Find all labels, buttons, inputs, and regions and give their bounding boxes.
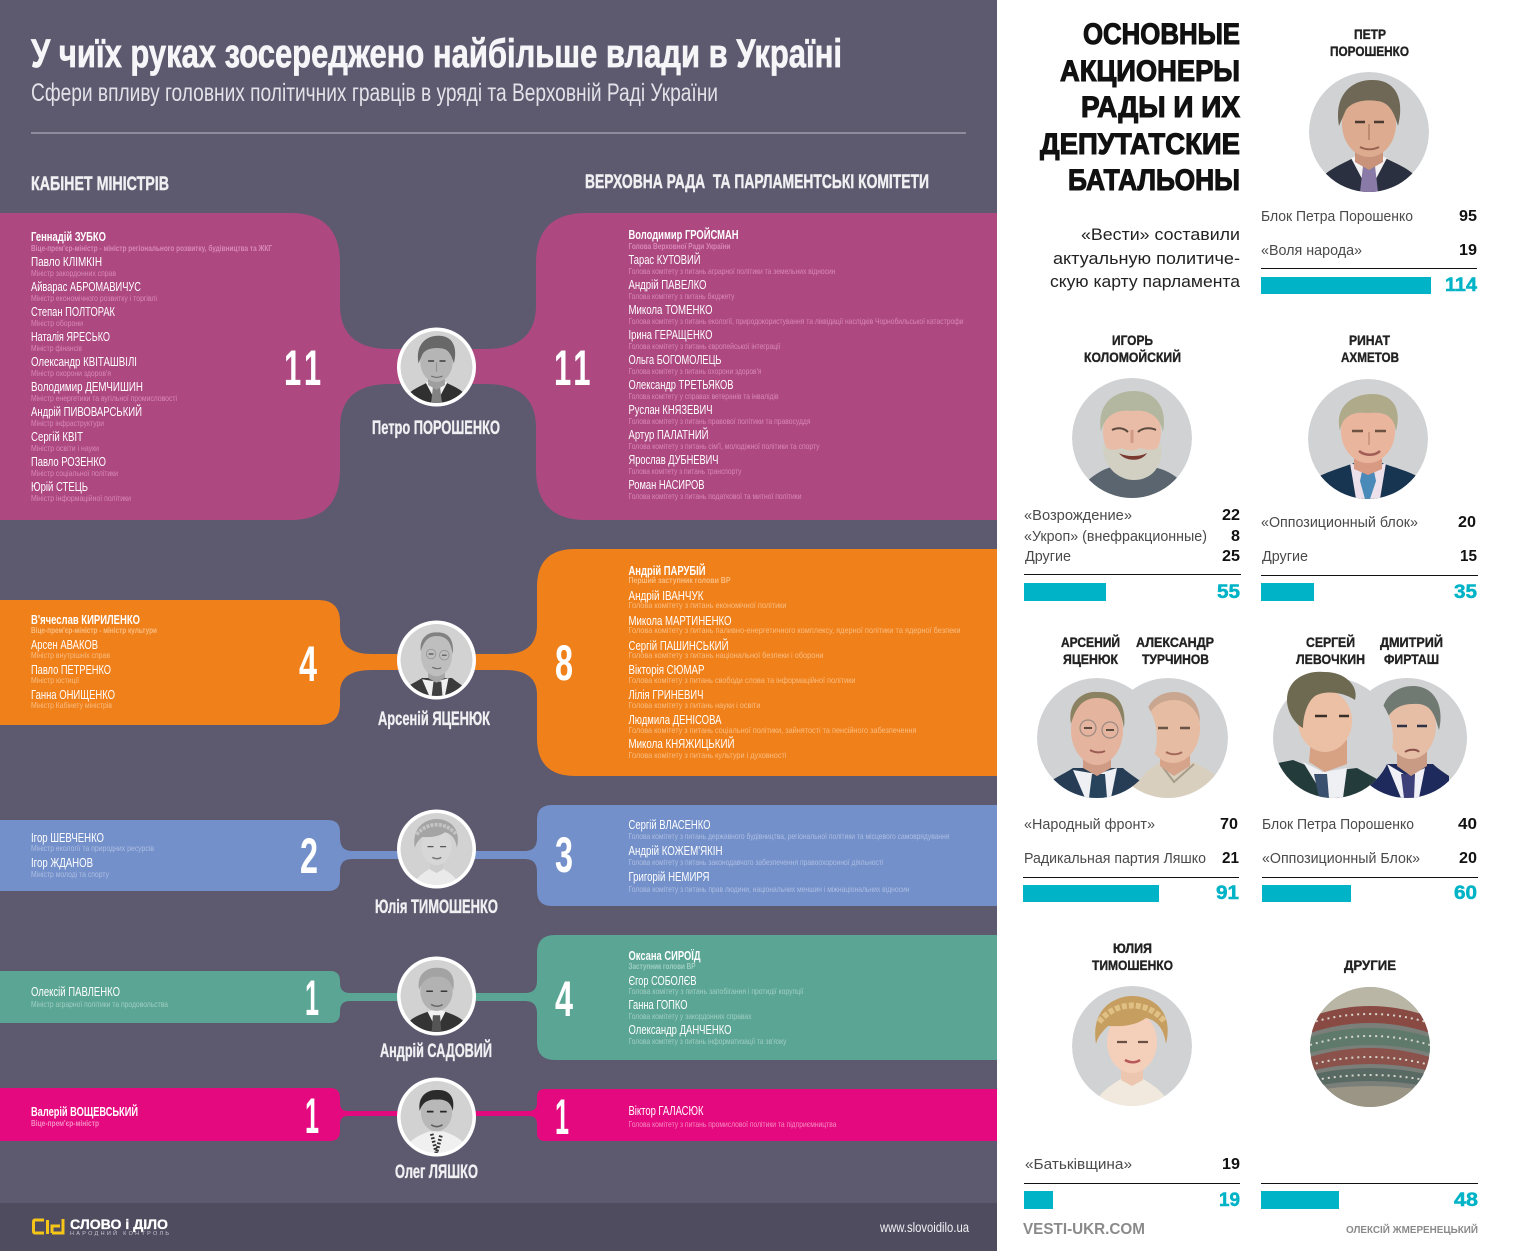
portrait: Sadovyi small [397,956,476,1036]
list: Poroshenko parliament: Голова комітету з питань сім'ї, молодіжної політики та спорту [628,441,820,451]
list: Poroshenko parliament: Голова комітету з питань транспорту [628,466,742,476]
list: Tymoshenko ministers: Ігор ЖДАНОВ [31,855,93,870]
name: Arsenii Yatseniuk: Арсеній ЯЦЕНЮК [378,709,490,730]
count: ministers 2: 2 [300,828,318,884]
card: Yatseniuk and Turchynov: «Народный фронт» [1024,816,1155,833]
list: Poroshenko ministers: Віце-прем'єр-міністр - міністр регіонального розвитку, будівництва та ЖКГ [31,243,272,253]
list: Poroshenko ministers: Міністр соціальної політики [31,468,118,478]
list: Sadovyi parliament: Оксана СИРОЇД [628,948,701,963]
source credit: VESTI-UKR.COM [1023,1221,1145,1238]
list: Sadovyi parliament: Голова комітету у закордонних справах [628,1011,752,1021]
card: Akhmetov: АХМЕТОВ [1341,350,1399,365]
website url: www.slovoidilo.ua [879,1219,969,1235]
card: Kolomoisky [1024,333,1241,603]
card: Yatseniuk and Turchynov [1023,635,1239,904]
list: Yatseniuk parliament: Голова комітету з питань паливно-енергетичного комплексу, ядерної політики та ядерної безпеки [628,625,961,635]
list: Lyashko minister [31,1104,138,1128]
count: committees 4: 4 [555,971,573,1027]
card: others: ДРУГИЕ [1344,958,1396,973]
card: Levochkin and Firtash: ЛЕВОЧКИН [1296,652,1365,667]
list: Yatseniuk parliament: Андрій ІВАНЧУК [628,588,704,603]
card: Levochkin and Firtash: 40 [1458,816,1477,833]
column heading: parliament: ВЕРХОВНА РАДА ТА ПАРЛАМЕНТСЬКІ КОМІТЕТИ [585,172,929,193]
list: Yatseniuk parliament: Голова комітету з питань національної безпеки і оборони [628,650,824,660]
card: Poroshenko: Блок Петра Порошенко [1261,208,1413,225]
list: Poroshenko parliament: Голова комітету з питань охорони здоров'я [628,366,762,376]
lead text [1050,225,1241,291]
card: Akhmetov: 15 [1460,548,1477,565]
list: Yatseniuk parliament: Голова комітету з питань науки і освіти [628,700,761,710]
list: Yatseniuk parliament: Лілія ГРИНЕВИЧ [628,687,704,702]
card: Poroshenko: 114 [1445,275,1477,296]
list: Yatseniuk ministers: Віце-прем'єр-міністр - міністр культури [31,625,157,635]
lead text: актуальную политиче- [1053,249,1240,268]
list: Poroshenko ministers: Сергій КВІТ [31,429,83,444]
list: Lyashko parliament: Голова комітету з питань промислової політики та підприємництва [628,1119,837,1129]
list: Tymoshenko parliament: Григорій НЕМИРЯ [628,869,710,884]
list: Sadovyi parliament: Голова комітету з питань інформатизації та зв'язку [628,1036,787,1046]
list: Lyashko minister: Валерій ВОЩЕВСЬКИЙ [31,1104,138,1119]
list: Tymoshenko ministers: Міністр молоді та спорту [31,869,110,879]
list: Poroshenko parliament: Ярослав ДУБНЕВИЧ [628,452,718,467]
main title: У чиїх руках зосереджено найбільше влади в Україні [31,32,842,76]
list: Yatseniuk parliament: Микола КНЯЖИЦЬКИЙ [628,736,734,751]
card: others [1261,958,1478,1211]
list: Poroshenko parliament: Голова комітету з питань податкової та митної політики [628,491,802,501]
list: Poroshenko parliament: Ірина ГЕРАЩЕНКО [628,327,712,342]
portrait: Poroshenko small [397,328,476,406]
logo: Slovo i Dilo: СЛОВО і ДІЛО [70,1217,168,1232]
card: Levochkin and Firtash: ДМИТРИЙ [1380,635,1443,650]
list: Poroshenko parliament: Артур ПАЛАТНИЙ [628,427,708,442]
right heading: БАТАЛЬОНЫ [1068,164,1240,197]
list: Yatseniuk parliament: Сергій ПАШИНСЬКИЙ [628,638,728,653]
card: Tymoshenko: 19 [1219,1190,1240,1211]
list: Sadovyi ministers: Олексій ПАВЛЕНКО [31,984,120,999]
card: Akhmetov: Другие [1262,548,1308,565]
author credit: ОЛЕКСІЙ ЖМЕРЕНЕЦЬКИЙ [1346,1223,1478,1236]
list: Poroshenko ministers [31,229,272,503]
list: Poroshenko ministers: Павло РОЗЕНКО [31,454,106,469]
right heading: ОСНОВНЫЕ [1083,18,1240,51]
list: Poroshenko ministers: Олександр КВІТАШВІЛІ [31,354,137,369]
list: Tymoshenko parliament: Сергій ВЛАСЕНКО [628,817,710,832]
list: Poroshenko parliament: Голова комітету у справах ветеранів та інвалідів [628,391,779,401]
card: Levochkin and Firtash: «Оппозиционный Блок» [1262,850,1420,867]
right heading [1040,18,1240,197]
card: Yatseniuk and Turchynov: 21 [1222,850,1239,867]
list: Poroshenko ministers: Міністр енергетики та вугільної промисловості [31,393,177,403]
list: Tymoshenko ministers [31,830,154,879]
list: Sadovyi parliament: Ганна ГОПКО [628,997,688,1012]
list: Poroshenko parliament: Голова комітету з питань екології, природокористування та ліквідації наслідків Чорнобильської катастрофи [628,316,964,326]
subtitle: Сфери впливу головних політичних гравців в уряді та Верховній Раді України [31,79,718,107]
card: Kolomoisky: ИГОРЬ [1112,333,1153,348]
list: Yatseniuk ministers [31,612,157,710]
list: Tymoshenko parliament: Голова комітету з питань державного будівництва, регіональної політики та місцевого самоврядування [628,831,950,841]
card: others: 48 [1454,1190,1478,1211]
list: Yatseniuk ministers: Міністр юстиції [31,675,80,685]
list: Poroshenko ministers: Павло КЛІМКІН [31,254,102,269]
list: Poroshenko ministers: Айварас АБРОМАВИЧУС [31,279,141,294]
lead text: «Вести» составили [1081,225,1240,244]
panel: Poroshenko group [0,213,997,520]
name: Andrii Sadovyi: Андрій САДОВИЙ [380,1040,492,1062]
card: Poroshenko: ПОРОШЕНКО [1330,44,1409,59]
card: Levochkin and Firtash [1262,635,1478,904]
list: Yatseniuk ministers: Арсен АВАКОВ [31,637,98,652]
list: Poroshenko ministers: Наталія ЯРЕСЬКО [31,329,110,344]
list: Tymoshenko ministers: Міністр екології та природних ресурсів [31,843,154,853]
panel: Yatseniuk group [0,549,997,776]
count: committees 3: 3 [555,827,573,883]
list: Poroshenko ministers: Міністр освіти і науки [31,443,99,453]
card: Tymoshenko: «Батьківщина» [1025,1156,1132,1173]
count: ministers 1: 1 [305,970,319,1026]
count: ministers 11: 11 [284,339,321,396]
list: Yatseniuk ministers: Павло ПЕТРЕНКО [31,662,111,677]
name: Petro Poroshenko: Петро ПОРОШЕНКО [372,418,500,439]
list: Poroshenko ministers: Геннадій ЗУБКО [31,229,106,244]
card: Kolomoisky: 55 [1217,582,1240,603]
count: committees 1: 1 [555,1089,569,1145]
right heading: АКЦИОНЕРЫ [1060,55,1240,88]
portrait: Tymoshenko small [397,810,476,888]
list: Poroshenko ministers: Юрій СТЕЦЬ [31,479,88,494]
list: Poroshenko ministers: Міністр економічного розвитку і торгівлі [31,293,157,303]
footer band [0,1203,997,1251]
card: Levochkin and Firtash: СЕРГЕЙ [1306,635,1355,650]
card: Yatseniuk and Turchynov: ТУРЧИНОВ [1142,652,1209,667]
list: Poroshenko ministers: Міністр інформаційної політики [31,493,131,503]
card: Poroshenko: 19 [1459,242,1477,259]
column heading: cabinet: КАБІНЕТ МІНІСТРІВ [31,174,169,195]
portrait: Yatseniuk small [397,620,476,700]
card: Kolomoisky: «Возрождение» [1024,507,1132,524]
list: Poroshenko parliament: Голова комітету з питань аграрної політики та земельних відносин [628,266,836,276]
card: Yatseniuk and Turchynov: 70 [1220,816,1238,833]
panel: Tymoshenko group [0,805,997,906]
card: Tymoshenko: 19 [1222,1156,1240,1173]
right heading: РАДЫ И ИХ [1081,91,1240,124]
logo: Slovo i Dilo: НАРОДНИЙ КОНТРОЛЬ [70,1229,169,1237]
list: Poroshenko ministers: Міністр охорони здоров'я [31,368,111,378]
list: Tymoshenko ministers: Ігор ШЕВЧЕНКО [31,830,104,845]
list: Yatseniuk parliament: Голова комітету з питань свободи слова та інформаційної політики [628,675,856,685]
card: Akhmetov: РИНАТ [1349,333,1391,348]
list: Yatseniuk parliament: Перший заступник голови ВР [628,575,731,585]
list: Poroshenko parliament [628,227,964,501]
card: Poroshenko: «Воля народа» [1261,242,1362,259]
card: Kolomoisky: КОЛОМОЙСКИЙ [1084,350,1181,365]
list: Yatseniuk ministers: Міністр Кабінету міністрів [31,700,112,710]
list: Tymoshenko parliament: Андрій КОЖЕМ'ЯКІН [628,843,722,858]
list: Yatseniuk ministers: Ганна ОНИЩЕНКО [31,687,115,702]
list: Poroshenko parliament: Голова комітету з питань правової політики та правосуддя [628,416,811,426]
card: Tymoshenko [1024,941,1240,1211]
list: Sadovyi parliament: Єгор СОБОЛЄВ [628,973,696,988]
list: Sadovyi parliament [628,948,804,1046]
count: ministers 4: 4 [299,636,317,692]
card: Yatseniuk and Turchynov: Радикальная партия Ляшко [1024,850,1206,867]
card: Akhmetov: 20 [1458,514,1476,531]
list: Poroshenko parliament: Голова комітету з питань європейської інтеграції [628,341,781,351]
list: Sadovyi parliament: Заступник голови ВР [628,961,696,971]
card: Akhmetov [1261,333,1478,603]
card: Levochkin and Firtash: ФИРТАШ [1384,652,1439,667]
lead text: скую карту парламента [1050,272,1241,291]
list: Sadovyi ministers: Міністр аграрної політики та продовольства [31,999,168,1009]
list: Poroshenko ministers: Володимир ДЕМЧИШИН [31,379,143,394]
list: Yatseniuk parliament: Голова комітету з питань економічної політики [628,600,787,610]
name: Oleh Lyashko: Олег ЛЯШКО [395,1162,478,1183]
list: Lyashko parliament [628,1103,837,1129]
right heading: ДЕПУТАТСКИЕ [1040,128,1240,161]
card: Kolomoisky: 22 [1222,507,1240,524]
card: Yatseniuk and Turchynov: АРСЕНИЙ [1061,635,1120,650]
list: Poroshenko parliament: Голова комітету з питань бюджету [628,291,735,301]
list: Poroshenko parliament: Олександр ТРЕТЬЯКОВ [628,377,734,392]
panel: Lyashko group [0,1088,997,1145]
card: Akhmetov: «Оппозиционный блок» [1261,514,1418,531]
list: Yatseniuk parliament: Андрій ПАРУБІЙ [628,563,706,578]
card: Poroshenko: ПЕТР [1354,27,1386,42]
card: Kolomoisky: Другие [1025,548,1071,565]
list: Poroshenko ministers: Міністр фінансів [31,343,82,353]
list: Yatseniuk parliament: Голова комітету з питань соціальної політики, зайнятості та пенсійного забезпечення [628,725,917,735]
card: Tymoshenko: ЮЛИЯ [1113,941,1152,956]
list: Poroshenko ministers: Міністр оборони [31,318,83,328]
list: Yatseniuk parliament: Вікторія СЮМАР [628,662,704,677]
card: Poroshenko: 95 [1459,208,1477,225]
list: Poroshenko parliament: Микола ТОМЕНКО [628,302,712,317]
list: Yatseniuk ministers: Міністр внутрішніх справ [31,650,110,660]
name: Yulia Tymoshenko: Юлія ТИМОШЕНКО [375,897,498,918]
list: Poroshenko parliament: Руслан КНЯЗЕВИЧ [628,402,712,417]
list: Sadovyi parliament: Голова комітету з питань запобігання і протидії корупції [628,986,804,996]
card: Tymoshenko: ТИМОШЕНКО [1092,958,1173,973]
list: Poroshenko parliament: Ольга БОГОМОЛЕЦЬ [628,352,722,367]
list: Poroshenko parliament: Тарас КУТОВИЙ [628,252,700,267]
list: Poroshenko ministers: Андрій ПИВОВАРСЬКИЙ [31,404,142,419]
list: Tymoshenko parliament [628,817,950,894]
card: Yatseniuk and Turchynov: ЯЦЕНЮК [1063,652,1119,667]
card: Yatseniuk and Turchynov: АЛЕКСАНДР [1136,635,1214,650]
card: Yatseniuk and Turchynov: 91 [1216,883,1239,904]
card: Levochkin and Firtash: 20 [1459,850,1477,867]
card: Kolomoisky: 25 [1222,548,1240,565]
logo: Slovo i Dilo [34,1217,169,1237]
panel: Sadovyi group [0,935,997,1060]
list: Poroshenko parliament: Голова Верховної Ради України [628,241,730,251]
card: Levochkin and Firtash: Блок Петра Порошенко [1262,816,1414,833]
list: Tymoshenko parliament: Голова комітету з питань законодавчого забезпечення правоохоронної діяльності [628,857,884,867]
list: Poroshenko ministers: Міністр інфраструктури [31,418,104,428]
card: Akhmetov: 35 [1454,582,1477,603]
list: Poroshenko parliament: Роман НАСИРОВ [628,477,704,492]
list: Yatseniuk ministers: В'ячеслав КИРИЛЕНКО [31,612,140,627]
left dark background panel [0,0,997,1251]
list: Poroshenko parliament: Володимир ГРОЙСМАН [628,227,738,242]
list: Lyashko minister: Віце-прем'єр-міністр [31,1118,99,1128]
list: Poroshenko parliament: Андрій ПАВЕЛКО [628,277,706,292]
list: Poroshenko ministers: Міністр закордонних справ [31,268,116,278]
portrait: Lyashko small [397,1078,476,1156]
list: Yatseniuk parliament: Людмила ДЕНІСОВА [628,712,722,727]
list: Poroshenko ministers: Степан ПОЛТОРАК [31,304,115,319]
card: Levochkin and Firtash: 60 [1454,883,1477,904]
list: Sadovyi ministers [31,984,168,1009]
count: committees 11: 11 [554,339,590,396]
list: Lyashko parliament: Віктор ГАЛАСЮК [628,1103,704,1118]
card: Poroshenko [1261,27,1477,296]
count: ministers 1: 1 [305,1088,319,1144]
list: Sadovyi parliament: Олександр ДАНЧЕНКО [628,1022,732,1037]
card: Kolomoisky: 8 [1231,528,1240,545]
list: Yatseniuk parliament [628,563,961,760]
count: committees 8: 8 [555,635,573,691]
card: Kolomoisky: «Укроп» (внефракционные) [1024,528,1207,545]
list: Tymoshenko parliament: Голова комітету з питань прав людини, національних меншин і міжнаціональних відносин [628,884,910,894]
list: Yatseniuk parliament: Голова комітету з питань культури і духовності [628,750,787,760]
list: Yatseniuk parliament: Микола МАРТИНЕНКО [628,613,732,628]
